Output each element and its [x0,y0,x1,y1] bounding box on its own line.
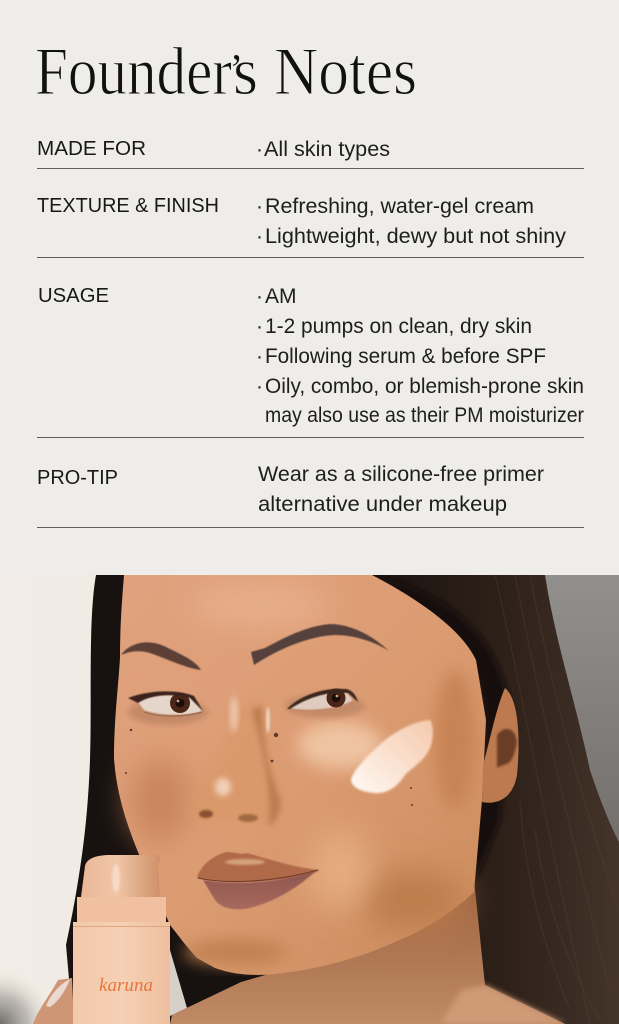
title [35,33,417,109]
row: texture and finish: · [256,195,263,218]
row: usage: AM [265,285,296,308]
tube body [73,922,170,1024]
title: Notes [274,33,417,109]
row: made for: All skin types [264,138,390,161]
row: usage: · [256,315,263,338]
row: texture and finish: Lightweight, dewy but not shiny [265,225,567,248]
brand logo: karuna [99,975,153,996]
row: usage: · [256,375,263,398]
skin shading and highlights [132,585,475,964]
row: texture and finish: TEXTURE & FINISH [37,195,219,217]
row: usage: USAGE [38,285,109,307]
eye: right [285,688,365,718]
lips [197,852,320,909]
hair: right [370,575,619,1024]
row: pro-tip: PRO-TIP [37,467,118,489]
panel: model photo [0,575,619,1024]
row: pro-tip: alternative under makeup [258,493,507,516]
row: pro-tip: Wear as a silicone-free primer [258,463,544,486]
hair: left [66,575,267,1024]
eye: left [128,691,208,725]
hair strands [494,575,582,1010]
row: usage: · [256,345,263,368]
hair: right inner shadow [370,575,510,880]
fingernail [46,979,70,1007]
title: s [233,33,258,109]
row: usage: · [256,285,263,308]
ear [482,688,519,803]
row: texture and finish: · [256,225,263,248]
product bottle [73,855,170,1024]
row: usage [37,285,584,438]
row: pro-tip [37,463,584,528]
title: Founder [35,33,232,109]
pump head [81,855,160,897]
row: usage: 1-2 pumps on clean, dry skin [265,315,532,338]
neck and shoulder [170,880,565,1024]
moles [125,729,413,806]
panel: notes table [37,138,584,528]
face [114,575,486,975]
hand [33,978,74,1024]
row: made for: MADE FOR [37,138,146,160]
panel: notes background [0,0,619,575]
row: texture and finish: Refreshing, water-gel cream [265,195,534,218]
row: usage: Oily, combo, or blemish-prone skin [265,375,584,398]
row: usage: Following serum & before SPF [265,345,546,368]
wall sliver by bottle [170,950,187,1016]
row: texture and finish [37,195,584,258]
cream swatch [351,720,433,793]
row: made for: · [256,138,263,161]
eyebrow: left [121,642,201,670]
row: usage: may also use as their PM moisturizer [265,404,584,427]
title: ’ [229,45,244,94]
eyebrow: right [251,624,389,665]
collar [77,897,166,923]
nose [191,696,280,826]
wall background [0,575,619,1024]
row: made for [37,138,584,169]
